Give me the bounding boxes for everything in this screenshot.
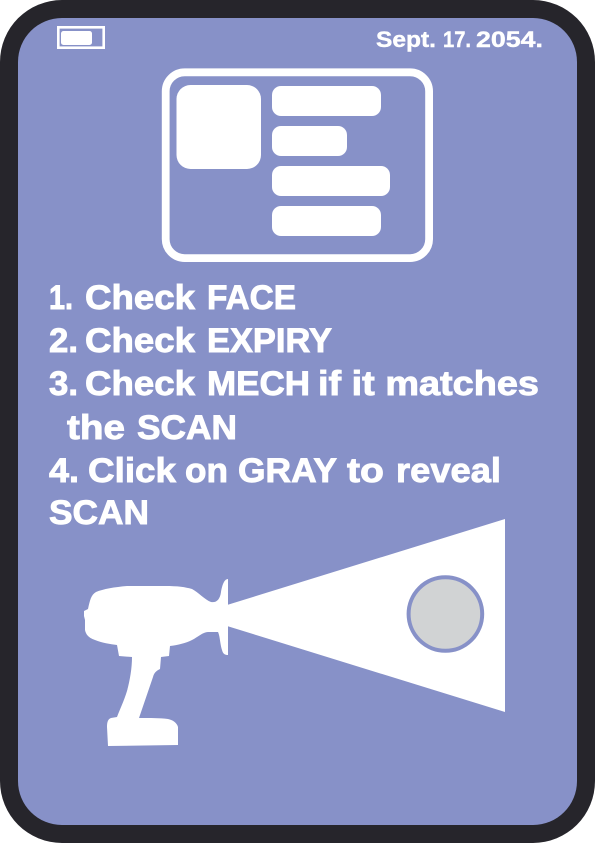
step 4 <box>49 452 501 532</box>
step 4: on <box>185 452 228 490</box>
scanner illustration <box>84 519 505 746</box>
date: 2054. <box>476 27 543 52</box>
step 3: Check <box>85 365 196 403</box>
step 3: the <box>67 409 125 447</box>
step 4: to <box>347 452 384 490</box>
step 3: if it matches <box>318 365 539 403</box>
icon: ID card <box>166 72 429 258</box>
step 1 <box>49 279 296 317</box>
step 4: SCAN <box>49 494 149 532</box>
step 1: FACE <box>207 279 296 317</box>
icon: battery <box>58 27 104 48</box>
step 3: 3. <box>49 365 78 403</box>
gray scan circle <box>409 577 482 651</box>
instructions text <box>49 279 539 532</box>
date <box>376 27 543 52</box>
date: 17. <box>443 27 471 52</box>
step 2 <box>49 322 332 360</box>
step 2: 2. <box>49 322 78 360</box>
step 1: 1. <box>49 279 73 317</box>
icon: scanner gun <box>84 579 228 746</box>
step 4: reveal <box>396 452 501 490</box>
scan light beam <box>227 519 505 712</box>
step 1: Check <box>85 279 196 317</box>
step 3: SCAN <box>137 409 237 447</box>
step 4: 4. <box>49 452 79 490</box>
step 3: MECH <box>207 365 310 403</box>
step 2: EXPIRY <box>207 322 332 360</box>
step 2: Check <box>85 322 196 360</box>
date: Sept. <box>376 27 436 52</box>
step 3 <box>49 365 539 447</box>
step 4: GRAY <box>238 452 337 490</box>
step 4: Click <box>88 452 177 490</box>
